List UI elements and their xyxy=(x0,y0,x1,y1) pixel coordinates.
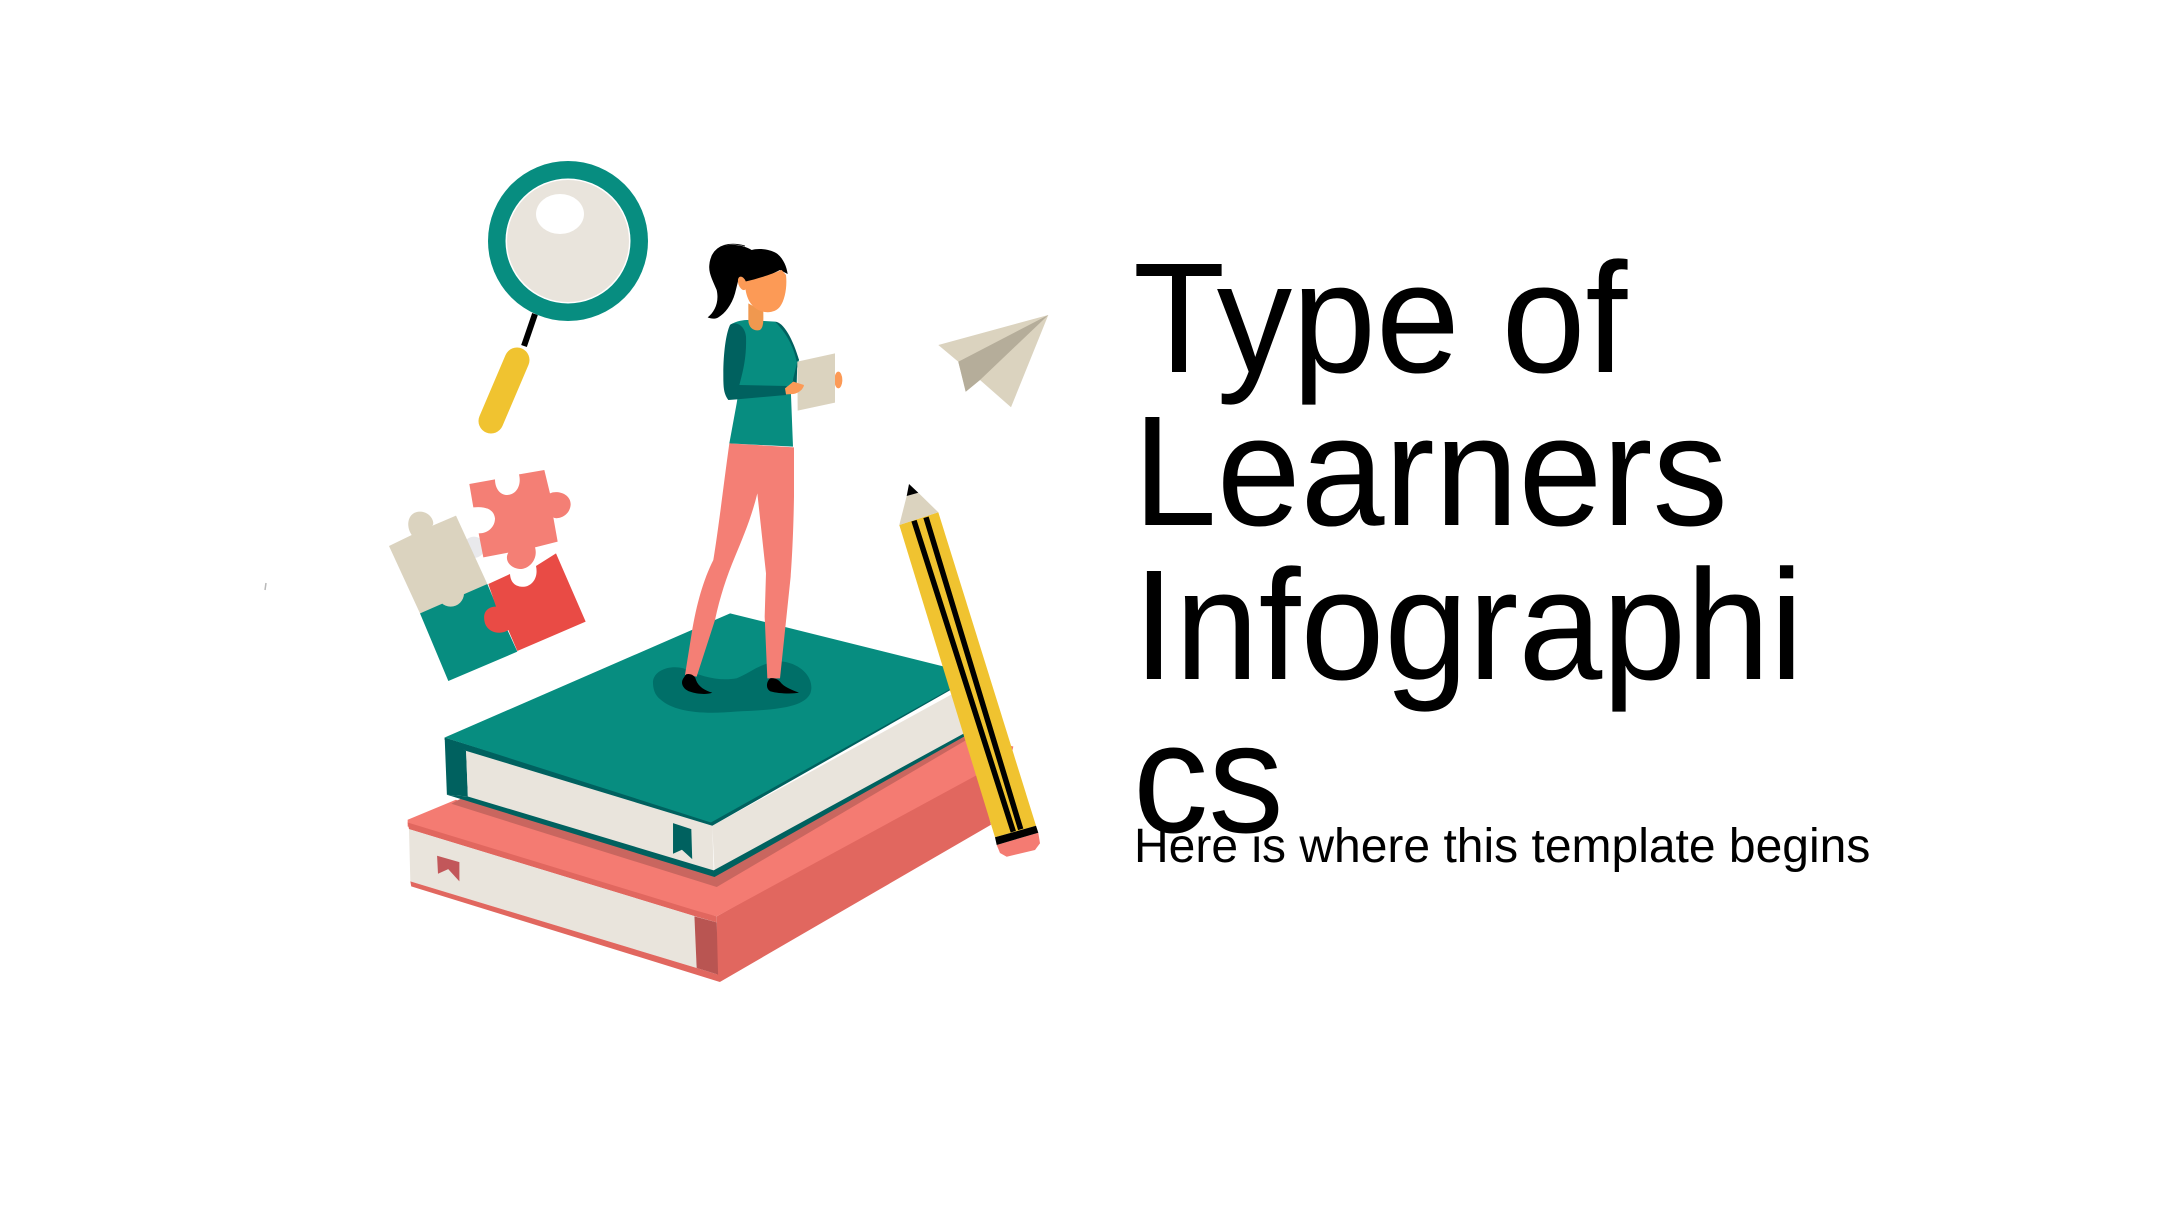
title xyxy=(1133,231,1803,866)
icon: magnifying glass xyxy=(488,161,648,421)
green book xyxy=(445,613,964,877)
icon: paper plane xyxy=(938,315,1048,407)
title: cs xyxy=(1133,691,1284,866)
shadow under feet xyxy=(653,661,811,713)
icon: jigsaw puzzle xyxy=(389,470,586,681)
subtitle: Here is where this template begins xyxy=(1134,820,1870,873)
title: Learners xyxy=(1133,384,1728,559)
bookmark: red book xyxy=(437,856,459,881)
red book xyxy=(408,733,1013,982)
title: Type of xyxy=(1133,231,1627,406)
title: Infographi xyxy=(1133,538,1803,713)
woman figure xyxy=(682,244,842,694)
upper body xyxy=(708,244,842,447)
legs and shoes xyxy=(682,443,799,694)
icon: pencil xyxy=(899,484,1040,857)
small stray mark xyxy=(265,583,266,590)
